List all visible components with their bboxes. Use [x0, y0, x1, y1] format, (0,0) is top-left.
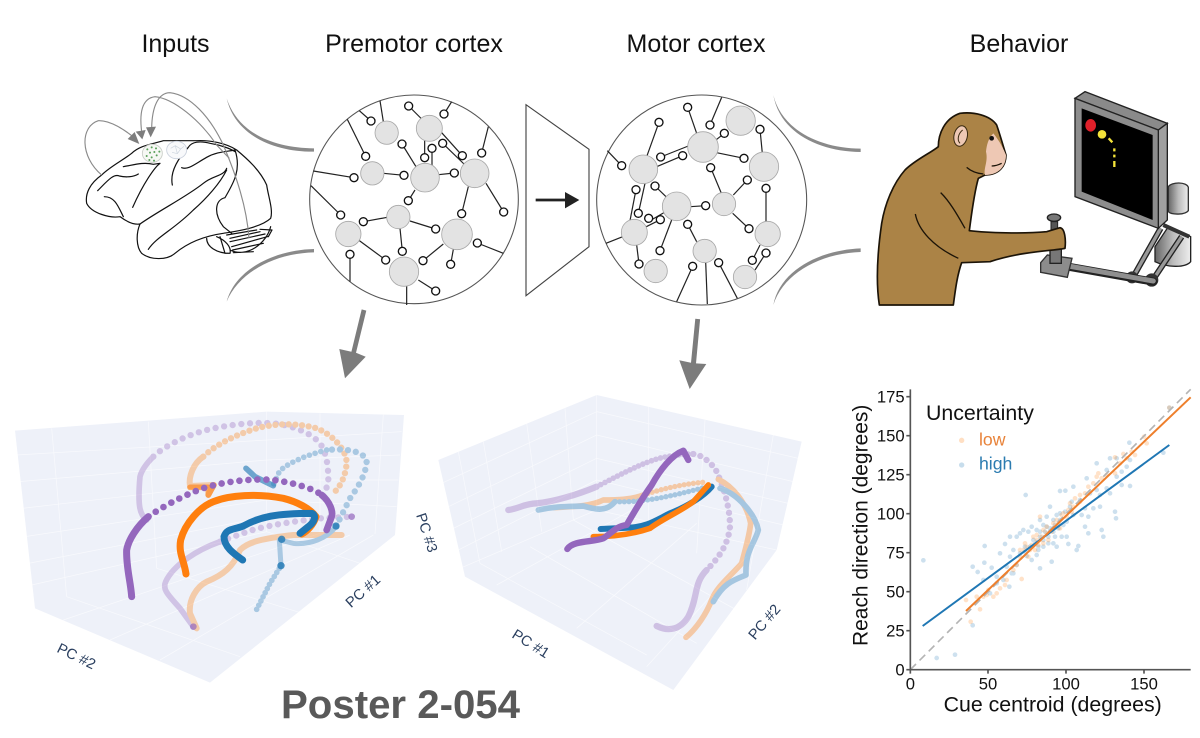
panel: monkey at joystick and screen — [773, 92, 1191, 305]
y tick labels: 25 — [886, 622, 905, 641]
x axis title: Cue centroid (degrees) — [944, 692, 1162, 716]
legend: high — [979, 454, 1012, 474]
x tick labels: 100 — [1052, 674, 1080, 693]
legend: low — [979, 429, 1006, 449]
heading: Motor cortex: Motor cortex — [627, 30, 766, 58]
identity line — [910, 389, 1191, 670]
heading: Inputs: Inputs — [141, 30, 210, 58]
faded trajectories — [508, 454, 758, 637]
panel: premotor network — [310, 95, 518, 305]
arrow: motor to trajectories — [679, 319, 706, 389]
strong orange trajectory — [593, 485, 708, 537]
axis label: PC #2: PC #2 — [746, 602, 784, 643]
y axis title: Reach direction (degrees) — [849, 405, 872, 646]
bracket curves: motor to behavior — [773, 95, 861, 305]
y tick labels: 125 — [877, 466, 905, 485]
monkey figure — [877, 113, 1065, 305]
strong purple trajectory — [127, 480, 332, 597]
x tick labels: 50 — [979, 674, 997, 693]
scatter points: high uncertainty — [923, 408, 1169, 658]
icon: brain with input arrows — [85, 93, 272, 259]
x tick labels — [906, 674, 1158, 693]
bracket curves: inputs to premotor — [227, 98, 314, 302]
y tick labels: 50 — [886, 583, 905, 602]
y tick labels: 175 — [877, 388, 905, 407]
strong orange trajectory — [180, 495, 316, 574]
faded trajectories — [139, 423, 367, 628]
axes — [906, 389, 1191, 674]
strong blue trajectory — [601, 487, 712, 529]
heading: Behavior: Behavior — [970, 30, 1068, 58]
y tick labels: 150 — [877, 427, 905, 446]
strong purple trajectory — [567, 451, 688, 549]
y tick labels: 0 — [895, 661, 905, 680]
axis label: PC #2: PC #2 — [54, 641, 98, 673]
brain area: premotor — [142, 144, 162, 162]
y tick labels: 100 — [877, 505, 905, 524]
chart: premotor 3D trajectories — [15, 412, 404, 683]
chart: reach direction vs cue centroid scatter — [849, 388, 1191, 716]
chart: motor 3D trajectories — [438, 395, 802, 690]
y tick labels: 75 — [886, 544, 905, 563]
strong blue trajectory — [224, 513, 315, 560]
robot arm — [1041, 183, 1191, 287]
scatter points: low uncertainty — [966, 408, 1169, 622]
x tick labels: 0 — [906, 674, 915, 693]
monitor — [1075, 92, 1167, 228]
x tick labels: 150 — [1130, 674, 1158, 693]
axis label: PC #3: PC #3 — [412, 511, 440, 555]
axis label: PC #1: PC #1 — [509, 627, 552, 662]
panel: motor network — [597, 95, 807, 305]
brain area: motor — [167, 141, 187, 159]
legend: Uncertainty — [926, 401, 1034, 425]
title: poster number: Poster 2-054 — [281, 682, 521, 727]
heading: Premotor cortex: Premotor cortex — [325, 30, 503, 58]
legend — [926, 401, 1034, 474]
fit line: low uncertainty — [966, 397, 1191, 611]
arrow: premotor to trajectories — [339, 309, 366, 378]
axis label: PC #1: PC #1 — [343, 572, 384, 611]
fit line: high uncertainty — [923, 445, 1169, 626]
icon: trapezoid connector with arrow — [526, 105, 589, 296]
y tick labels — [877, 388, 905, 680]
